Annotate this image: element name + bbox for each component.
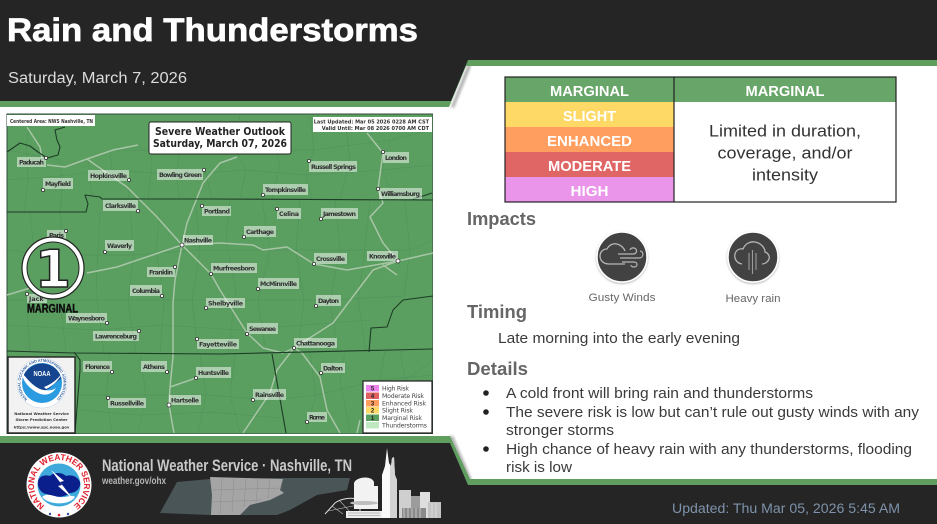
city: Dayton [314,295,341,308]
city: Carthage [242,226,276,239]
city: Paducah: Paducah [19,160,44,166]
timing heading: Timing [467,302,527,322]
footer office name: National Weather Service · Nashville, TN [102,456,352,475]
noaa logo box: Storm Prediction Center [16,417,68,422]
details heading: Details [467,359,528,379]
city: Tompkinsville [261,184,308,197]
label: update times [313,117,432,132]
city: Fayetteville: Fayetteville [199,342,237,348]
city: Tompkinsville: Tompkinsville [265,187,306,194]
city: Rainsville: Rainsville [255,392,284,399]
map legend: 2 [371,408,375,414]
city: Chattanooga: Chattanooga [296,340,335,348]
city: Crossville [312,253,347,266]
city: Jackson: Jack [28,296,44,303]
city: Mayfield: Mayfield [45,181,71,188]
risk category table: HIGH [570,184,608,200]
city: Hopkinsville: Hopkinsville [90,173,127,180]
city: Celina: Celina [279,211,299,218]
map legend: 3 [371,402,375,408]
outlook title box: Severe Weather Outlook [155,126,286,138]
city: Shelbyville: Shelbyville [208,300,243,308]
city: Dalton [319,363,345,375]
city: Waverly [103,240,134,254]
noaa logo box [7,356,76,434]
city: Williamsburg: Williamsburg [381,191,420,198]
risk category table: coverage, and/or [718,144,853,162]
city: Clarksville [103,200,140,213]
city: Paducah [17,156,48,167]
risk badge: 1 marginal: MARGINAL [27,302,78,316]
city: Paris [47,229,68,240]
city: Rome: Rome [309,414,325,422]
city: Sewanee [245,323,278,336]
date subtitle: Saturday, March 7, 2026 [8,70,187,87]
map legend: Moderate Risk [382,393,424,400]
city: Shelbyville [204,298,245,310]
city: Russellville [106,396,146,408]
label: heavy rain: Heavy rain [726,293,780,305]
outlook title box [149,122,291,154]
city: Jamestown [319,208,358,221]
risk category table: SLIGHT [563,109,616,125]
details bullet list: The severe risk is low but can’t rule out gusty winds with any [506,405,920,421]
label: gusty winds: Gusty Winds [588,292,656,304]
city: Huntsville [194,367,231,380]
map legend: Enhanced Risk [382,400,426,408]
icon: gusty winds [597,232,647,282]
details bullet list: High chance of heavy rain with any thunderstorms, flooding [506,442,912,458]
map legend: 5 [371,386,375,392]
city: Athens [141,361,169,374]
noaa logo box: National Weather Service [14,411,69,416]
city: Dayton: Dayton [318,298,339,305]
risk category table: Limited in duration, [709,122,861,140]
city: Florence [83,361,114,374]
tennessee map [160,477,350,515]
risk category table [505,77,896,202]
city: Hopkinsville [88,170,131,182]
city: Fayetteville [195,337,239,349]
map legend: Thunderstorms [381,422,427,430]
city: Rome [305,412,327,424]
details bullet list: risk is low [506,460,573,476]
timing text: Late morning into the early evening [498,331,740,347]
outlook title box: Saturday, March 07, 2026 [153,138,287,150]
county lines [7,114,433,433]
city: Clarksville: Clarksville [105,203,136,210]
city: Nashville: Nashville [184,238,212,244]
risk category table: MARGINAL [550,84,629,100]
city: Paris: Paris [49,232,64,240]
city: Mayfield [41,178,73,192]
city: Bowling Green: Bowling Green [159,172,202,179]
city: Russell Springs: Russell Springs [311,164,356,171]
highways [7,127,433,433]
city: McMinnville: McMinnville [260,281,297,288]
noaa logo box: NATIONAL OCEANIC AND ATMOSPHERIC ADMINISTRATION [18,359,66,401]
city: Dalton: Dalton [323,366,343,372]
footer website: weather.gov/ohx [101,476,166,487]
city: Jackson [25,292,47,303]
city: Franklin [147,265,177,277]
city: Sewanee: Sewanee [249,326,276,333]
map legend: 4 [371,394,375,400]
city: Crossville: Crossville [316,256,345,263]
map legend [363,381,432,433]
city: Waynesboro [66,313,109,325]
city: Franklin: Franklin [149,270,173,276]
city: Nashville [180,235,213,247]
details bullet list: stronger storms [506,423,614,439]
risk badge: 1 marginal: 1 [35,240,71,300]
city: Russell Springs [307,159,357,172]
city: Athens: Athens [143,364,165,371]
map legend: Slight Risk [382,408,413,414]
details bullet list: A cold front will bring rain and thunderstorms [506,386,813,402]
city: Celina [275,207,301,219]
icon: heavy rain [728,232,778,282]
city: McMinnville [256,278,299,291]
risk category table: ENHANCED [547,134,632,150]
risk category table: MODERATE [548,159,631,175]
state borders [7,127,433,433]
city: Huntsville: Huntsville [198,370,229,377]
footer banner [0,436,937,524]
map legend: Marginal Risk [382,415,422,422]
nashville skyline [325,448,441,518]
details bullet list [483,386,920,476]
city: Columbia [130,285,164,298]
city: Chattanooga [292,338,337,350]
risk category table: intensity [752,166,819,184]
city: Lawrenceburg: Lawrenceburg [95,334,137,340]
map legend: 1 [371,416,375,422]
city: Rainsville [251,389,286,402]
impacts heading: Impacts [467,209,536,229]
risk badge: 1 marginal [22,237,84,316]
header banner [0,0,937,108]
city: Murfreesboro: Murfreesboro [213,266,256,272]
noaa logo box: NOAA [34,371,50,378]
label: update times: Last Updated: Mar 05 2026 0228 AM CST [314,120,430,126]
city: Waynesboro: Waynesboro [68,316,106,322]
title: Rain and Thunderstorms [7,12,418,48]
city: Murfreesboro [209,263,257,276]
city: London [381,150,409,163]
city: Columbia: Columbia [132,288,160,295]
risk category table: MARGINAL [746,84,825,100]
city: Jamestown: Jamestown [322,211,356,218]
city: Lawrenceburg [93,329,141,341]
label: update times: Valid Until: Mar 08 2026 0700 AM CDT [322,126,430,132]
city: Russellville: Russellville [110,400,144,408]
map legend: High Risk [382,386,409,392]
city: Portland: Portland [204,208,230,216]
map: severe weather outlook [6,114,433,434]
city: Hartselle: Hartselle [171,398,199,404]
updated timestamp: Updated: Thu Mar 05, 2026 5:45 AM [672,501,900,516]
label: centered area [7,115,95,126]
city: Williamsburg [376,187,422,199]
label: centered area: Centered Area: NWS Nashville, TN [10,119,93,125]
city: Hartselle [167,395,201,407]
nws logo: NATIONAL WEATHER SERVICE [28,454,90,510]
city: Portland [200,204,231,216]
city: Bowling Green [157,168,206,180]
city: Florence: Florence [85,364,110,371]
noaa logo box: https://www.spc.noaa.gov [14,424,70,430]
city: Waverly: Waverly [107,243,132,250]
city: Knoxville [367,251,400,263]
city: Carthage: Carthage [246,229,274,236]
city: London: London [385,155,407,162]
city: Knoxville: Knoxville [369,254,396,260]
